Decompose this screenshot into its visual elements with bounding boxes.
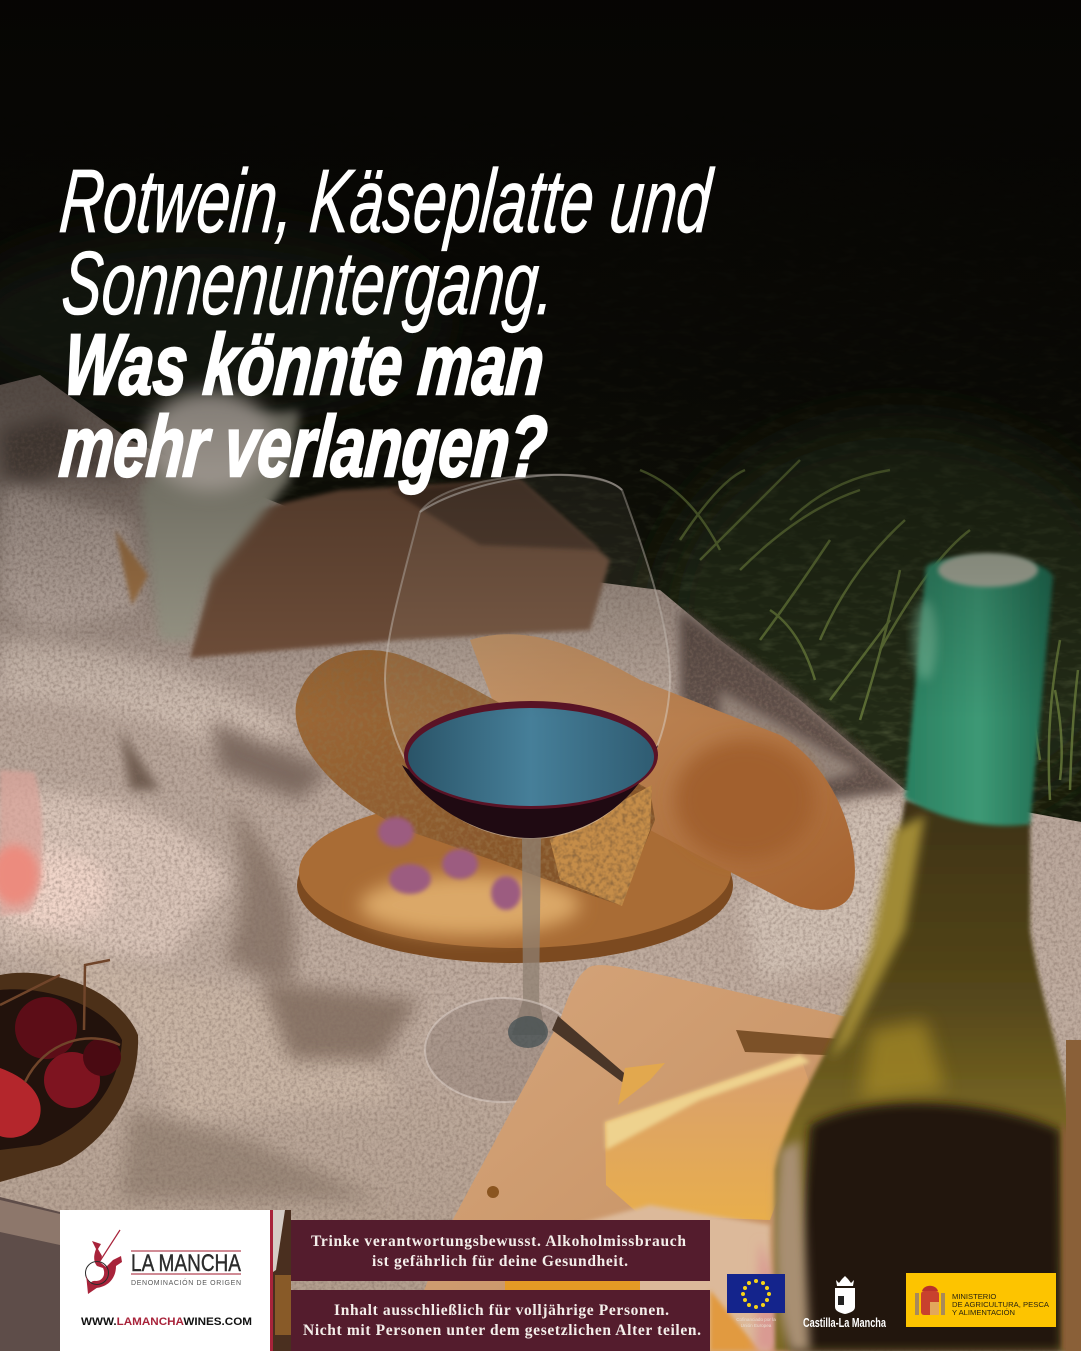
title line 2: Sonnenuntergang. [58,233,559,334]
title line 1: Rotwein, Käseplatte und [56,151,717,252]
wooden serving board [297,796,733,963]
dark top gradient overlay [0,0,1081,720]
logo: European Union: Unión Europea [741,1323,772,1328]
La Mancha wordmark [131,1250,241,1287]
icon: Spanish coat of arms [915,1286,945,1315]
purple flowers [378,817,521,910]
website url: WWW.LAMANCHA WINES.COM [81,1316,252,1328]
bottom left textile [0,1197,291,1351]
logo: Castilla-La Mancha: Castilla-La Mancha [803,1316,887,1330]
logo: Ministerio de Agricultura [906,1273,1056,1327]
logo: European Union [727,1274,785,1328]
soft cheese and bread at the bottom [505,1205,800,1351]
logo: European Union: Cofinanciado por la [736,1317,776,1322]
logo: Ministerio de Agricultura: MINISTERIO [952,1292,996,1301]
icon: La Mancha knight emblem [86,1230,122,1294]
brown paper bag and flowers [115,390,610,658]
blanket [0,375,1081,1351]
candle glass [0,770,42,916]
dark grass background [0,222,1081,822]
bowl of cherries [0,960,138,1182]
cutting board [400,965,860,1351]
wine bottle [775,553,1081,1351]
wedge of cheese [605,1055,815,1220]
logo: Ministerio de Agricultura: DE AGRICULTURA, PESCA [952,1300,1050,1309]
baguettes [296,634,855,910]
notice: responsible drinking [291,1220,710,1281]
logo panel: La Mancha [60,1210,273,1351]
wine glass [385,475,670,1102]
title [56,151,717,495]
notice: responsible drinking: ist gefährlich für deine Gesundheit. [372,1253,628,1270]
logo: Castilla-La Mancha [803,1276,887,1330]
title line 4 bold: mehr verlangen? [56,399,551,495]
logo: Ministerio de Agricultura: Y ALIMENTACIÓN [952,1308,1015,1317]
La Mancha wordmark: LA MANCHA [131,1250,241,1277]
right wooden edge [1066,1040,1081,1351]
title line 3 bold: Was könnte man [60,317,548,413]
La Mancha wordmark: DENOMINACIÓN DE ORIGEN [131,1278,241,1287]
notice: responsible drinking: Trinke verantwortungsbewusst. Alkoholmissbrauch [311,1233,686,1250]
notice: adults only: Inhalt ausschließlich für volljährige Personen. [334,1302,669,1319]
notice: adults only: Nicht mit Personen unter dem gesetzlichen Alter teilen. [303,1322,701,1339]
notice: adults only [291,1290,710,1351]
